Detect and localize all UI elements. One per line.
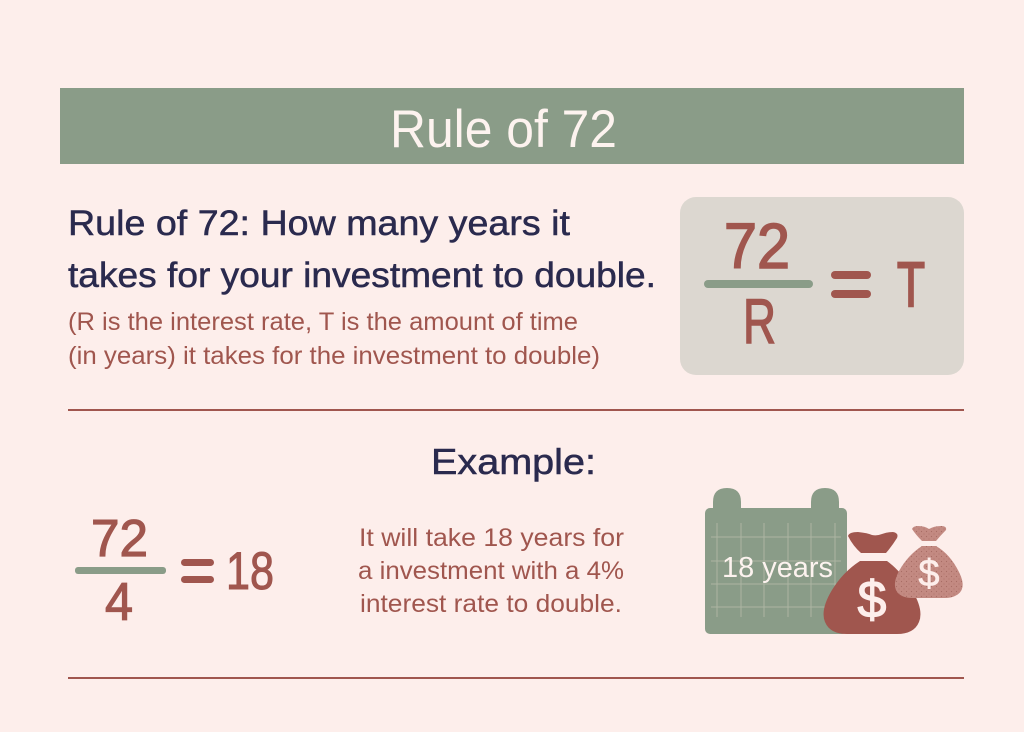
text block: example explanation: a investment with a 4% [358, 557, 624, 585]
example formula: 72 [91, 510, 148, 568]
heading: rule definition: Rule of 72: How many years it [68, 204, 570, 243]
heading: example: Example: [431, 441, 596, 482]
heading: rule definition: takes for your investment to double. [68, 256, 656, 295]
icon: calendar [705, 488, 847, 634]
icon: calendar: 18 years [722, 552, 833, 584]
text block: example explanation: interest rate to double. [360, 590, 622, 618]
text block: variable explanation [68, 308, 600, 370]
example formula: 18 [226, 542, 274, 601]
panel: formula: 72 [724, 210, 790, 282]
panel: formula: R [743, 287, 776, 357]
icon: large money bag: $ [858, 571, 887, 629]
icon: large money bag [824, 532, 920, 634]
text block: variable explanation: (R is the interest rate, T is the amount of time [68, 308, 578, 336]
heading: rule definition [68, 204, 656, 295]
panel: formula: T [897, 250, 925, 320]
panel: formula [680, 197, 964, 375]
example formula: 4 [105, 573, 133, 632]
title banner: Rule of 72 [390, 100, 617, 159]
example formula [75, 510, 274, 632]
text block: example explanation [358, 524, 624, 618]
icon: small money bag [895, 526, 963, 598]
icon: small money bag: $ [918, 553, 940, 595]
text block: variable explanation: (in years) it takes for the investment to double) [68, 342, 600, 370]
text block: example explanation: It will take 18 years for [359, 524, 624, 552]
title banner [60, 88, 964, 164]
